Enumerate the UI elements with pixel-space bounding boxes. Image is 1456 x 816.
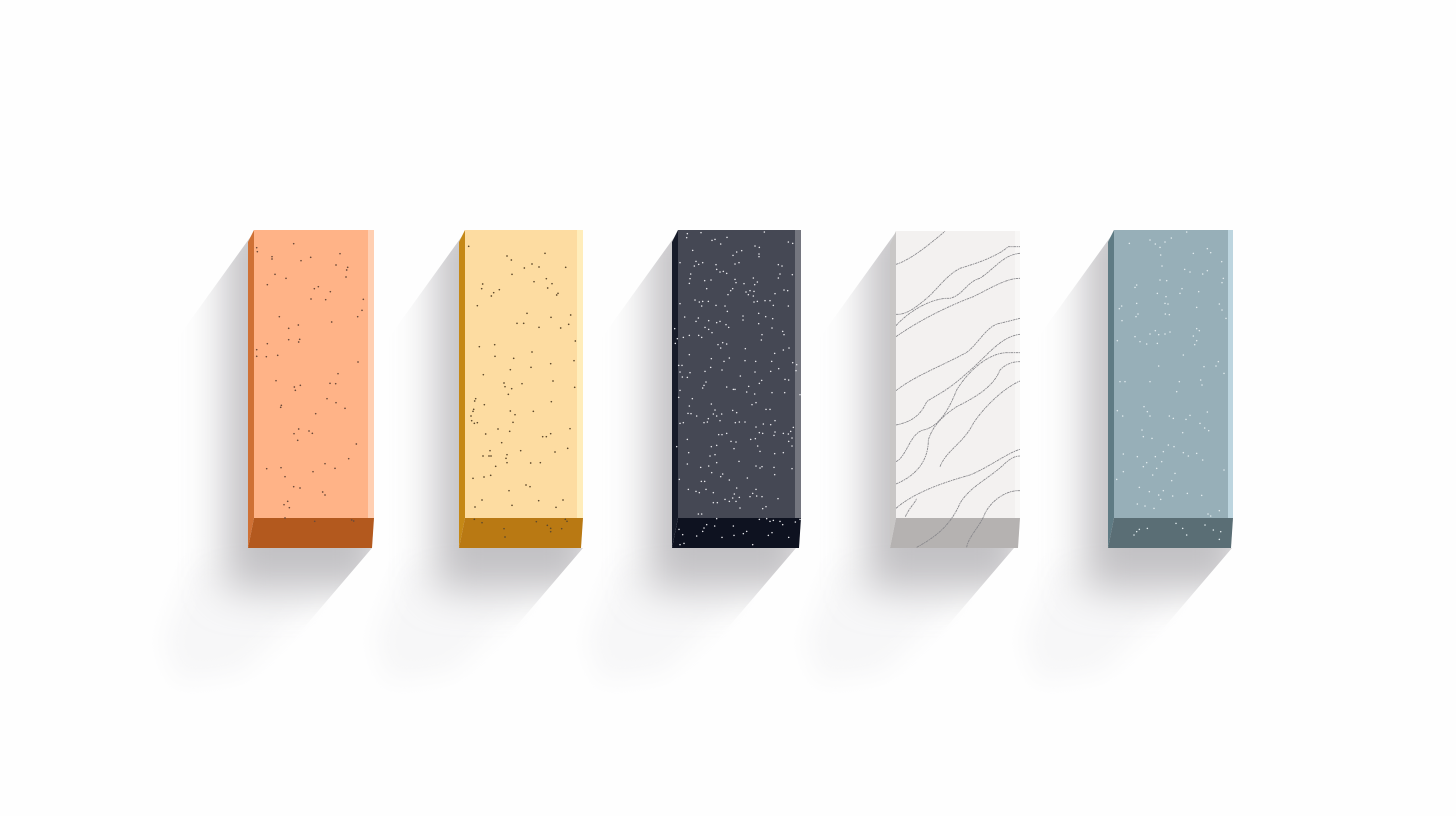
shadow: orange block [165,215,380,680]
illustration: five material blocks [196,230,1233,628]
front face: cream block [465,230,583,518]
left side: marble block [890,231,896,548]
veins: marble block [896,231,1020,547]
block 2: cream speckled [376,215,591,680]
bottom face: orange block [248,518,374,548]
speckles: orange block [257,244,363,521]
speckles: cream block [469,246,575,537]
shadow: marble block [807,215,1022,680]
bottom face: blue-grey block [1108,518,1233,548]
shadow: cream block [376,215,591,680]
block 3: charcoal speckled [589,215,804,680]
left side: cream block [459,230,465,548]
highlight: cream block [577,230,583,518]
shadow: blue-grey block [1025,215,1240,680]
front face: blue-grey block [1114,230,1233,518]
highlight: marble block [1015,231,1020,518]
speckles: charcoal block [675,232,800,545]
left side: blue-grey block [1108,230,1114,548]
highlight: orange block [368,230,374,518]
bottom face: marble block [890,518,1020,548]
front face: orange block [254,230,374,518]
bottom face: charcoal block [672,518,801,548]
speckles: blue-grey block [1117,232,1226,539]
left side: orange block [248,230,254,548]
block 5: blue-grey speckled [1025,215,1240,680]
block 1: orange speckled [165,215,380,680]
shadow: charcoal block [589,215,804,680]
front face: marble block [896,231,1020,518]
left side: charcoal block [672,230,678,548]
highlight: blue-grey block [1228,230,1233,518]
highlight: charcoal block [795,230,801,518]
front face: charcoal block [678,230,801,518]
block 4: white marble [838,231,1020,628]
bottom face: cream block [459,518,583,548]
